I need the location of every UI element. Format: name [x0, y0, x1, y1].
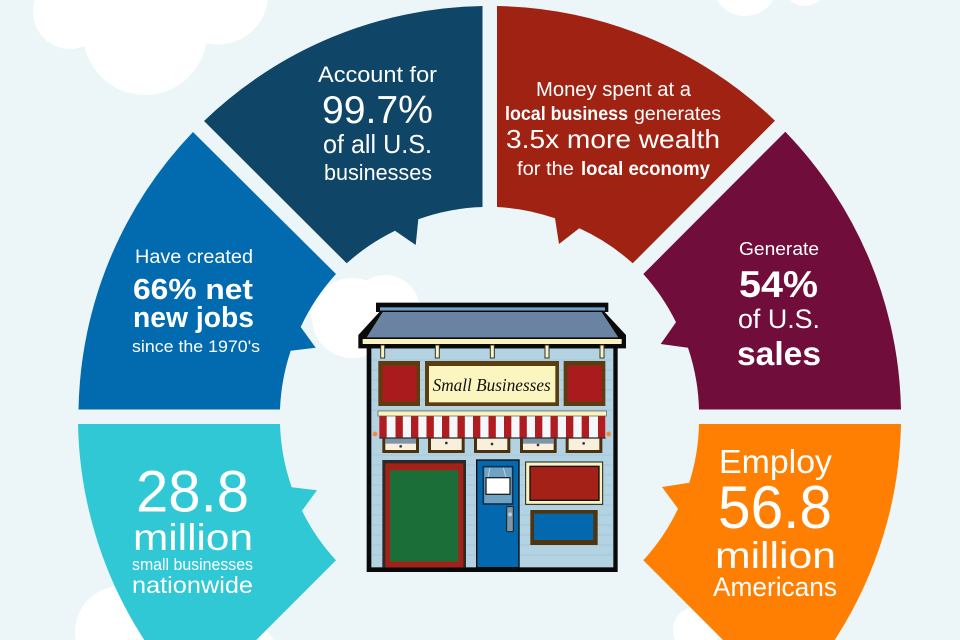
panel: 28.8 million small businesses: small businesses	[132, 555, 253, 574]
panel: account for 99.7%: businesses	[324, 160, 432, 185]
panel: employ 56.8 million: million	[715, 535, 836, 576]
panel: employ 56.8 million	[643, 424, 901, 640]
icon: storefront	[358, 303, 626, 572]
roof brackets	[381, 345, 604, 358]
panel: 28.8 million small businesses: nationwide	[132, 572, 253, 598]
panel: 28.8 million small businesses: 28.8	[136, 460, 249, 524]
left sign panel	[378, 361, 420, 406]
right red panel	[526, 462, 603, 504]
panel: employ 56.8 million: 56.8	[718, 474, 832, 541]
panel: 3.5x more wealth: Money spent at a	[536, 79, 692, 101]
panel: 66% net new jobs: new jobs	[133, 302, 254, 334]
panel: 3.5x more wealth	[497, 6, 775, 263]
panel: 3.5x more wealth: generates	[634, 104, 721, 125]
panel: 3.5x more wealth: for the	[517, 159, 574, 180]
store name sign	[425, 361, 559, 406]
panel: 66% net new jobs: since the 1970's	[132, 337, 260, 356]
panel: 3.5x more wealth: local business	[505, 104, 628, 125]
panel: 66% net new jobs: 66% net	[133, 274, 253, 306]
panel: 28.8 million small businesses	[78, 424, 336, 640]
left window	[382, 460, 466, 568]
right sign panel	[564, 361, 605, 406]
panel: 3.5x more wealth: 3.5x more wealth	[506, 124, 720, 154]
panel: 54% of U.S. sales: sales	[737, 335, 821, 372]
panel: account for 99.7%: Account for	[318, 62, 437, 87]
panel: 3.5x more wealth: local economy	[581, 159, 710, 180]
panel: employ 56.8 million: Employ	[719, 443, 833, 480]
panel: account for 99.7%: 99.7%	[322, 89, 433, 132]
panel: 54% of U.S. sales: Generate	[739, 239, 819, 259]
panel: 66% net new jobs: Have created	[135, 247, 253, 268]
panel: 54% of U.S. sales: of U.S.	[738, 304, 820, 334]
panel: 54% of U.S. sales	[643, 132, 901, 409]
panel: 54% of U.S. sales: 54%	[739, 264, 818, 305]
roof	[358, 303, 626, 348]
right blue panel	[530, 510, 598, 545]
small windows	[382, 437, 602, 453]
panel: account for 99.7%: of all U.S.	[323, 129, 432, 159]
panel: account for 99.7%	[204, 6, 482, 263]
panel: 66% net new jobs	[78, 132, 336, 410]
panel: employ 56.8 million: Americans	[713, 572, 837, 602]
building wall	[367, 347, 618, 572]
awning	[373, 411, 611, 439]
panel: 28.8 million small businesses: million	[133, 517, 253, 558]
store name sign: Small Businesses	[433, 375, 551, 395]
door	[477, 460, 519, 568]
